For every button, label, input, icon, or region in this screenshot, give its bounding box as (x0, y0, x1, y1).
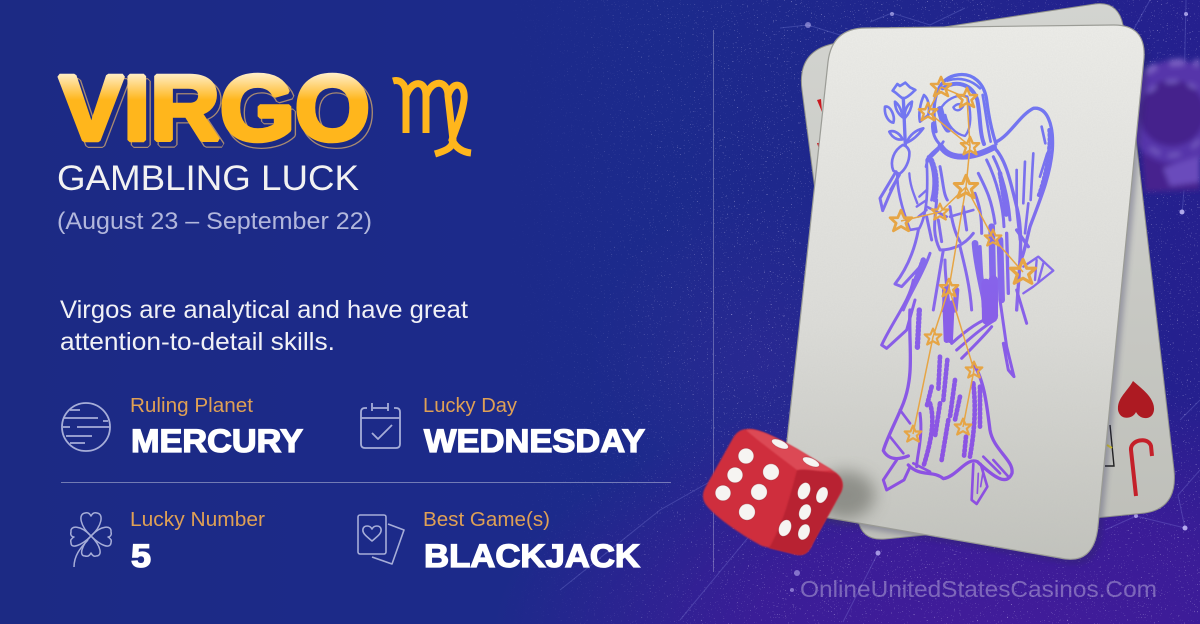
value: MERCURY (131, 423, 303, 459)
arm and hand (892, 145, 909, 174)
divider: horizontal (61, 482, 671, 483)
dice right face (769, 469, 842, 555)
constellation (890, 77, 1036, 442)
figure lower (882, 280, 1027, 504)
label: Lucky Day (423, 395, 517, 417)
heading: gambling luck: GAMBLING LUCK (57, 159, 359, 198)
card heart (1118, 381, 1154, 418)
shoulders and robe (994, 147, 1021, 310)
watermark: OnlineUnitedStatesCasinos.Com (800, 576, 1157, 602)
value: BLACKJACK (424, 538, 640, 574)
icon: clover (71, 513, 111, 567)
title: VIRGO: VIRGO (63, 61, 374, 165)
icon: cards (358, 515, 404, 564)
label: Lucky Number (130, 509, 265, 531)
red dice (703, 429, 843, 555)
title: VIRGO: VIRGO (63, 61, 374, 165)
flower (903, 98, 905, 145)
background (510, 0, 1200, 624)
stat: lucky number (71, 509, 265, 574)
wing (997, 108, 1053, 262)
stat: lucky day (361, 395, 645, 459)
label: Ruling Planet (130, 395, 253, 417)
virgo figure (880, 75, 1053, 504)
jack picture fragment (1105, 425, 1114, 466)
card suit fragments left (817, 99, 822, 149)
collar (941, 146, 994, 157)
poker chip blurred (1136, 56, 1200, 195)
date range: (August 23 – September 22) (57, 208, 372, 235)
card letter J (1131, 440, 1152, 496)
value: 5 (131, 538, 151, 574)
icon: planet (62, 403, 110, 451)
label: Best Game(s) (423, 509, 550, 531)
value: WEDNESDAY (424, 423, 645, 459)
title: VIRGO: VIRGO (59, 56, 370, 160)
playing card: front (783, 25, 1148, 564)
stat: best game (358, 509, 640, 574)
figure upper (880, 75, 1053, 310)
dice pips (715, 437, 830, 542)
description: attention-to-detail skills. (60, 328, 335, 356)
stat: ruling planet (62, 395, 303, 459)
playing card: back (801, 4, 1174, 539)
icon: virgo symbol (393, 81, 471, 154)
icon: calendar (361, 403, 400, 448)
description: Virgos are analytical and have great (60, 296, 468, 324)
description (60, 296, 468, 356)
divider: vertical (713, 30, 714, 572)
ribbon (880, 172, 899, 211)
dice shadow (815, 471, 875, 519)
dice top face (746, 430, 832, 471)
